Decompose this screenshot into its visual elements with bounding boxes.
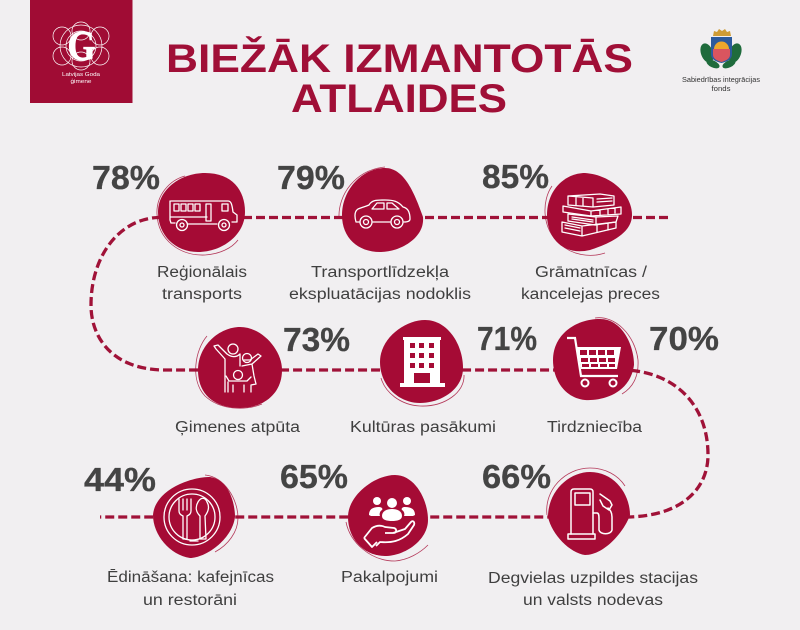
item: Ēdināšana: kafejnīcas un restorāni 44%: un restorāni [143, 592, 237, 609]
icon: plate with cutlery [164, 489, 220, 545]
item: Grāmatnīcas / kancelejas preces 85%: Grāmatnīcas / [535, 264, 648, 281]
item: Kultūras pasākumi 71%: Kultūras pasākumi [350, 419, 496, 436]
item: Tirdzniecība 70%: 70% [649, 320, 719, 357]
logo: Latvijas Goda ģimene [30, 0, 132, 103]
item: Ēdināšana: kafejnīcas un restorāni 44% [84, 461, 274, 609]
icon: car [355, 200, 410, 228]
icon: family [214, 344, 261, 392]
icon: fuel pump [568, 489, 612, 539]
item: Kultūras pasākumi 71%: 71% [477, 320, 537, 357]
item: Transportlīdzekļa ekspluatācijas nodoklis 79%: ekspluatācijas nodoklis [289, 286, 471, 303]
logo: Sabiedrības integrācijas fonds: fonds [712, 86, 731, 93]
logo: Latvijas Goda ģimene: ģimene [70, 78, 92, 85]
item: Pakalpojumi 65%: Pakalpojumi [341, 569, 438, 586]
item: Tirdzniecība 70% [547, 318, 719, 436]
item: Grāmatnīcas / kancelejas preces 85%: kancelejas preces [521, 286, 660, 303]
item: Ģimenes atpūta 73%: Ģimenes atpūta [175, 419, 300, 436]
item: Degvielas uzpildes stacijas un valsts nodevas 66%: 66% [482, 458, 551, 495]
title: ATLAIDES [291, 77, 507, 121]
item: Degvielas uzpildes stacijas un valsts nodevas 66%: un valsts nodevas [523, 592, 663, 609]
icon: bus [170, 201, 237, 230]
item: Reģionālais transports 78%: Reģionālais [157, 264, 247, 281]
item: Transportlīdzekļa ekspluatācijas nodoklis 79%: 79% [277, 159, 345, 196]
item: Degvielas uzpildes stacijas un valsts nodevas 66%: Degvielas uzpildes stacijas [488, 570, 698, 587]
icon: people in a hand [364, 497, 415, 547]
item: Ēdināšana: kafejnīcas un restorāni 44%: 44% [84, 461, 156, 498]
icon: building [400, 337, 445, 387]
logo: Latvijas Goda ģimene: Latvijas Goda [62, 72, 101, 78]
item: Kultūras pasākumi 71% [350, 320, 537, 436]
logo: Sabiedrības integrācijas fonds: Sabiedrības integrācijas [682, 77, 761, 84]
logo: Sabiedrības integrācijas fonds [682, 29, 761, 93]
item: Reģionālais transports 78%: 78% [92, 159, 160, 196]
item: Transportlīdzekļa ekspluatācijas nodoklis 79% [277, 159, 471, 303]
item: Reģionālais transports 78%: transports [162, 286, 242, 303]
item: Transportlīdzekļa ekspluatācijas nodoklis 79%: Transportlīdzekļa [311, 264, 449, 281]
icon: stack of books [562, 194, 621, 236]
item: Degvielas uzpildes stacijas un valsts nodevas 66% [482, 458, 698, 609]
title: BIEŽĀK IZMANTOTĀS [166, 35, 633, 81]
item: Pakalpojumi 65%: 65% [280, 458, 348, 495]
item: Grāmatnīcas / kancelejas preces 85% [482, 158, 660, 303]
logo: Latvijas Goda ģimene: G [68, 24, 96, 70]
item: Grāmatnīcas / kancelejas preces 85%: 85% [482, 158, 549, 195]
icon: shopping cart [567, 338, 621, 386]
item: Reģionālais transports 78% [92, 159, 247, 303]
item: Ģimenes atpūta 73%: 73% [283, 321, 350, 358]
item: Ēdināšana: kafejnīcas un restorāni 44%: Ēdināšana: kafejnīcas [107, 569, 274, 586]
item: Ģimenes atpūta 73% [175, 321, 350, 436]
item: Tirdzniecība 70%: Tirdzniecība [547, 419, 642, 436]
item: Pakalpojumi 65% [280, 458, 438, 586]
dashed connector path [91, 218, 708, 517]
title [166, 35, 633, 121]
